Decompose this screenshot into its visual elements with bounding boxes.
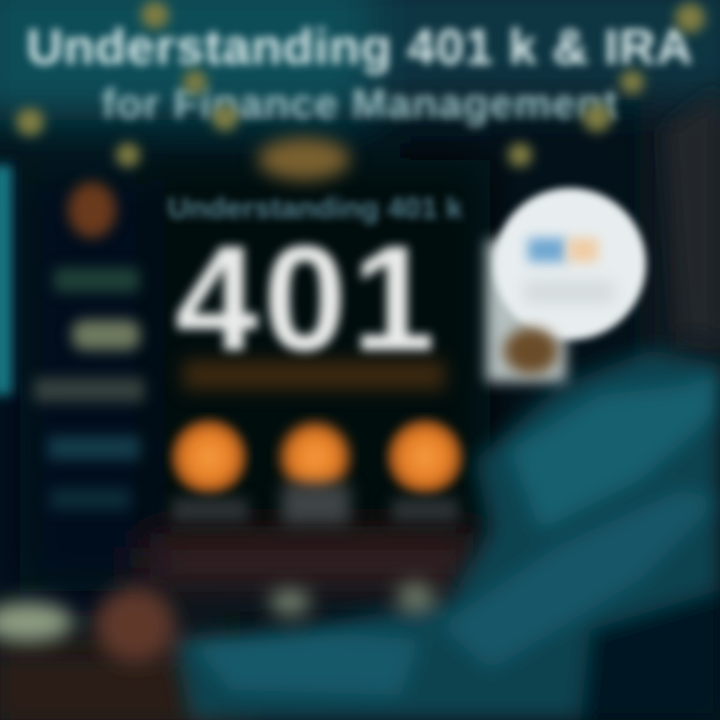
- paper base: [486, 240, 566, 382]
- big number 401: 401: [175, 214, 440, 382]
- sidebar panel: [28, 174, 150, 514]
- title: Understanding 401 k & IRA: [27, 19, 693, 75]
- sidebar row 5: [50, 488, 130, 510]
- orange icon 1: [164, 412, 254, 500]
- coin icon: [504, 328, 558, 374]
- left teal edge: [0, 165, 12, 395]
- icon label 1: [172, 498, 248, 522]
- white circle: [494, 188, 646, 340]
- big number panel: [169, 214, 454, 400]
- orange icons row: [164, 412, 470, 531]
- eye emblem: [258, 138, 350, 180]
- sidebar icon: [68, 182, 116, 238]
- round white badge: [475, 182, 652, 393]
- title: for Finance Management: [102, 80, 618, 127]
- icon label 2: [282, 484, 350, 524]
- amber underglow: [183, 360, 445, 390]
- title: [22, 19, 696, 133]
- orange icon 3: [380, 412, 470, 500]
- grey text lines: [524, 280, 614, 304]
- orange label: [568, 238, 598, 262]
- orange icon 2: [270, 412, 360, 493]
- subheading: Understanding 401 k: [167, 192, 463, 225]
- icon label 3: [392, 498, 458, 522]
- sidebar row 4: [48, 436, 140, 460]
- sidebar row 1: [54, 268, 139, 292]
- blue label: [528, 238, 566, 262]
- sidebar row 2: [72, 320, 140, 350]
- sidebar row 3: [34, 378, 144, 402]
